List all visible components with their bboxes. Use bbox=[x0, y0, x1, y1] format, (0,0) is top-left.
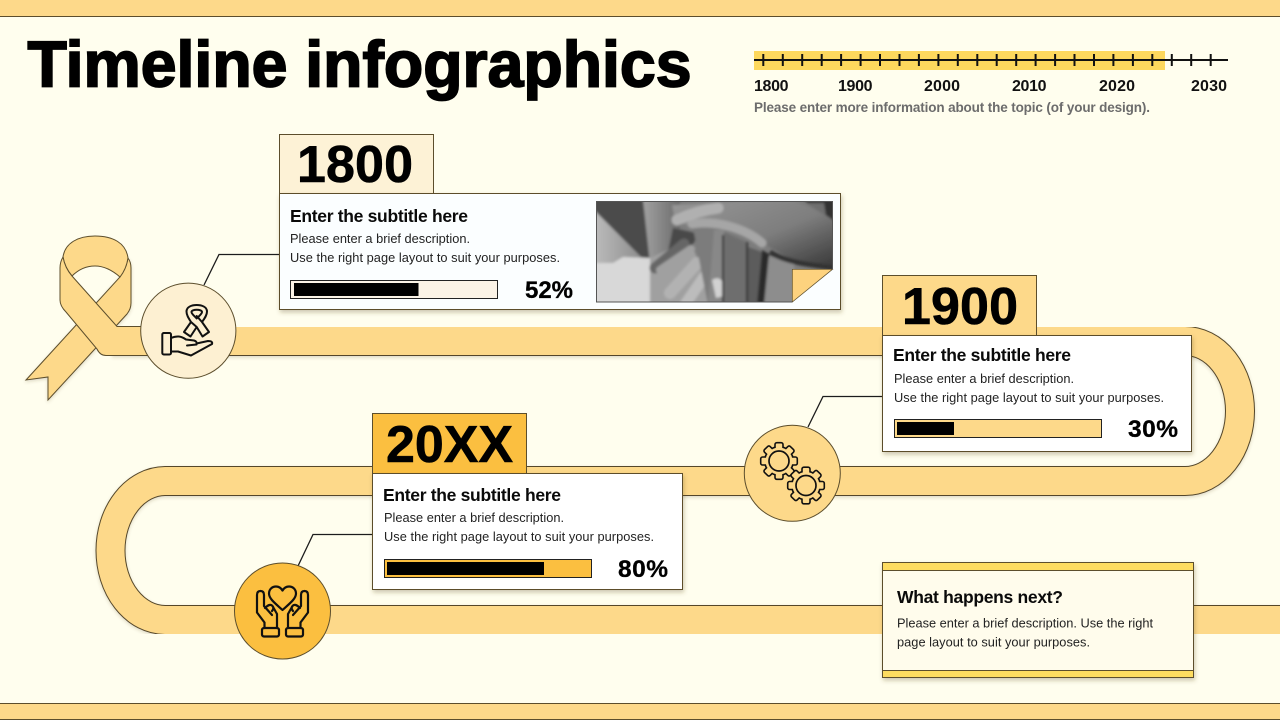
icon circle: hands holding heart bbox=[234, 563, 330, 659]
percentage 30: 30% bbox=[1128, 416, 1178, 443]
bottom border band bbox=[0, 704, 1280, 720]
card description bbox=[290, 231, 560, 265]
card top strip bbox=[882, 562, 1194, 570]
card description bbox=[894, 371, 1164, 405]
scale year labels: 1800 bbox=[754, 78, 789, 95]
icon: hand and ribbon bbox=[162, 305, 212, 356]
scale year labels bbox=[754, 78, 1227, 95]
winding road bbox=[110, 341, 1280, 620]
connector line 1800 bbox=[204, 254, 281, 285]
next description: Please enter a brief description. Use the right bbox=[897, 616, 1153, 630]
ribbon back: tail and right side of loop bbox=[26, 258, 131, 400]
card description: Please enter a brief description. bbox=[290, 231, 470, 246]
top border band bbox=[0, 0, 1280, 16]
photo of stacked hands bbox=[594, 199, 836, 305]
scale year labels: 2030 bbox=[1191, 78, 1227, 95]
scale timeline legend bbox=[754, 51, 1228, 115]
year tab 1900: 1900 bbox=[902, 278, 1018, 336]
progress bar 30% bbox=[894, 420, 1102, 438]
card: what happens next bbox=[882, 562, 1194, 678]
connector line 20XX bbox=[298, 534, 374, 566]
ribbon loop bbox=[63, 236, 128, 277]
icon circle: gears bbox=[744, 425, 840, 521]
card subtitle: Enter the subtitle here bbox=[290, 206, 468, 226]
card description: Please enter a brief description. bbox=[894, 371, 1074, 386]
connector line 1900 bbox=[808, 396, 884, 427]
year tab 1800: 1800 bbox=[297, 136, 413, 194]
next description: page layout to suit your purposes. bbox=[897, 634, 1090, 650]
icon circle: hand holding ribbon bbox=[141, 283, 236, 378]
card subtitle: Enter the subtitle here bbox=[383, 485, 561, 505]
title: Timeline infographics bbox=[28, 28, 692, 100]
card 20XX bbox=[372, 474, 682, 590]
card description: Use the right page layout to suit your purposes. bbox=[384, 529, 654, 544]
photo frame bbox=[596, 202, 832, 302]
next description bbox=[897, 616, 1153, 650]
year tab 20XX: 20XX bbox=[386, 416, 513, 474]
card description: Please enter a brief description. bbox=[384, 510, 564, 525]
card description: Use the right page layout to suit your purposes. bbox=[894, 390, 1164, 405]
scale tick marks bbox=[763, 54, 1211, 66]
icon: lower gear bbox=[788, 468, 824, 503]
card description bbox=[384, 510, 654, 544]
photo corner fold bbox=[792, 269, 834, 304]
ribbon front strip bbox=[60, 257, 170, 356]
card bottom strip bbox=[882, 670, 1194, 678]
card 1800 bbox=[280, 194, 840, 310]
scale year labels: 2000 bbox=[924, 78, 960, 95]
progress bar 80% bbox=[384, 560, 592, 578]
scale year labels: 1900 bbox=[838, 78, 873, 95]
percentage 80: 80% bbox=[618, 556, 668, 583]
scale year labels: 2010 bbox=[1012, 78, 1047, 95]
scale axis with ticks bbox=[754, 59, 1228, 61]
card subtitle: Enter the subtitle here bbox=[893, 345, 1071, 365]
icon: heart and hands bbox=[257, 586, 308, 636]
card 1900 bbox=[882, 336, 1192, 452]
next heading: What happens next? bbox=[897, 587, 1063, 607]
elapsed highlight band bbox=[754, 51, 1165, 70]
scale description: Please enter more information about the topic (of your design). bbox=[754, 100, 1150, 115]
scale year labels: 2020 bbox=[1099, 78, 1135, 95]
card description: Use the right page layout to suit your purposes. bbox=[290, 250, 560, 265]
progress bar 52% bbox=[290, 280, 498, 298]
percentage 52: 52% bbox=[525, 277, 573, 304]
icon: upper gear bbox=[762, 444, 796, 478]
